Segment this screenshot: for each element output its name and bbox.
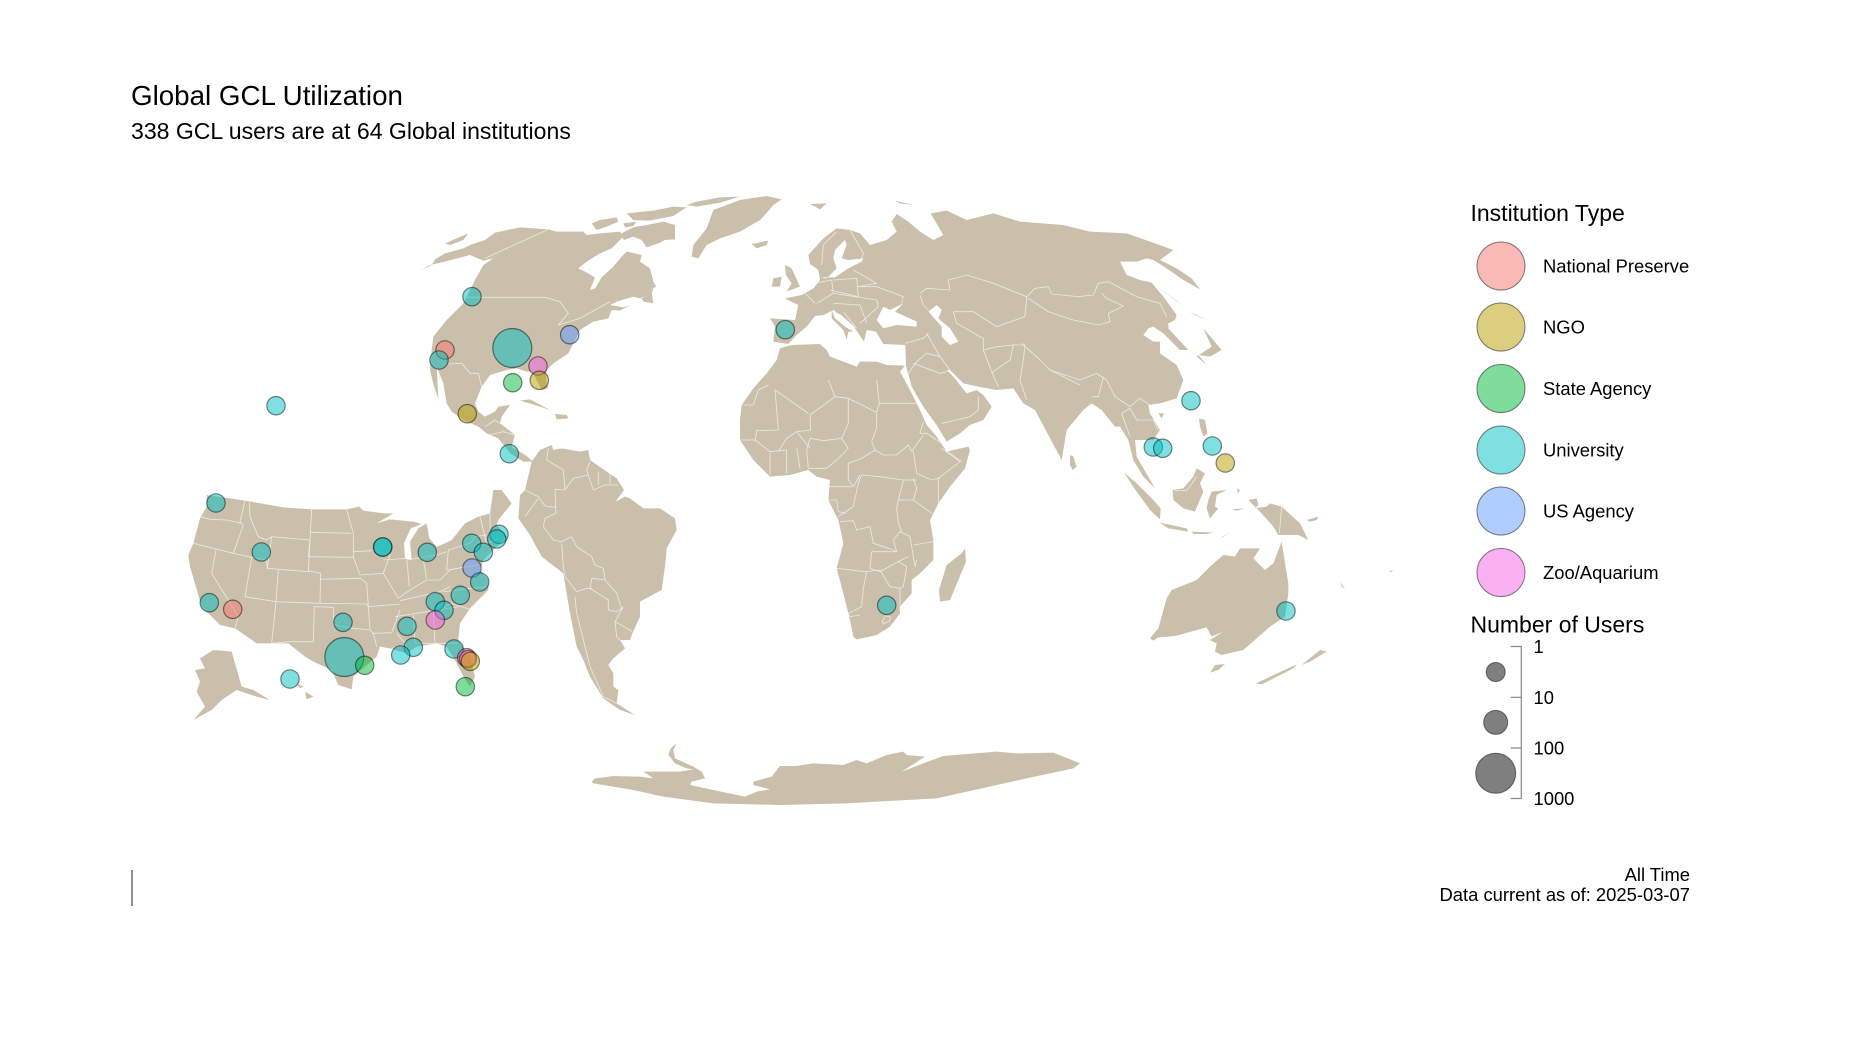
Moluccas — [1237, 488, 1240, 493]
borders: Oceania — [1175, 477, 1282, 533]
bubble: Vancouver university — [463, 288, 481, 306]
landmass: Oceania and Southeast Asia islands — [1124, 468, 1393, 684]
New Zealand — [1256, 664, 1297, 684]
Great Britain — [785, 265, 800, 292]
Italy — [832, 310, 853, 340]
bubble: Connecticut university — [488, 530, 506, 548]
legend item: Zoo/Aquarium — [1477, 548, 1659, 596]
Madagascar — [939, 548, 966, 602]
bubble: US inset university, Washington — [207, 494, 225, 512]
baseline tick mark — [131, 870, 133, 906]
bubble: Maryland US agency — [463, 559, 481, 577]
size scale labels: 100 — [1534, 738, 1564, 758]
New Guinea — [1248, 498, 1308, 540]
bubble: Thailand university — [1144, 438, 1163, 456]
bubble: Tennessee university — [426, 592, 444, 611]
bubble: Florida zoo — [458, 648, 476, 667]
legend item: NGO — [1477, 303, 1585, 351]
bubble: Mississippi university — [398, 617, 416, 636]
Hainan — [1158, 413, 1164, 418]
Adriatic — [835, 313, 855, 329]
legend heading: Institution Type — [1470, 200, 1625, 226]
bubble: south Florida state agency — [456, 678, 474, 696]
bubble: North Carolina university — [451, 586, 469, 604]
landmass: Antarctica — [592, 743, 1080, 805]
bubble: Mexico NGO — [458, 404, 476, 423]
world map — [188, 196, 1393, 805]
legend item: US Agency — [1477, 487, 1635, 535]
Java — [1160, 523, 1188, 532]
Newfoundland — [642, 292, 653, 303]
bubble: Washington DC US agency — [560, 326, 579, 344]
bubble: Virginia university — [470, 573, 489, 591]
bubble: New York university — [462, 534, 481, 552]
borders: North America — [448, 229, 610, 435]
bubble: Massachusetts university — [490, 525, 508, 544]
size scale labels: 1000 — [1534, 788, 1574, 809]
landmass: North America — [420, 196, 782, 462]
legend item: State Agency: State Agency — [1543, 378, 1652, 399]
Ireland — [772, 277, 782, 287]
bubble: north Texas university — [334, 613, 352, 632]
Alaska island — [445, 233, 468, 245]
landmass: contiguous United States inset — [188, 490, 512, 720]
legend: institution type — [1470, 200, 1689, 596]
bubble: Louisiana university — [392, 646, 410, 664]
bubble: Taiwan university — [1182, 392, 1200, 410]
bubble: Pennsylvania university — [474, 543, 492, 562]
bubble: Vietnam university — [1154, 439, 1172, 457]
subtitle: 338 GCL users are at 64 Global institutions — [131, 118, 571, 144]
landmass: South America — [518, 445, 677, 715]
Australia — [1150, 542, 1288, 655]
footer: time range and data date — [1440, 864, 1690, 905]
bubble: Mindanao NGO — [1216, 454, 1235, 472]
bubble: Wisconsin universities — [374, 538, 392, 556]
bubble: Australia university — [1277, 602, 1295, 620]
Alaska inset — [193, 650, 270, 720]
bubble: Florida NGO — [461, 652, 479, 670]
bubble: western US national preserve — [436, 341, 454, 359]
Tasmania — [1210, 664, 1225, 673]
Sulawesi — [1207, 490, 1227, 518]
borders: Africa — [740, 380, 962, 624]
bubble: Costa Rica university — [500, 444, 518, 463]
Sri Lanka — [1070, 455, 1077, 470]
size legend heading: Number of Users — [1470, 612, 1644, 638]
Black Sea — [877, 303, 917, 328]
size scale labels: 10 — [1534, 687, 1554, 708]
bubble: Texas state agency — [356, 656, 374, 674]
size scale labels — [1534, 636, 1574, 809]
New Caledonia — [1340, 582, 1345, 589]
legend: number of users — [1470, 612, 1644, 809]
bubble: Hawaii inset university — [281, 670, 299, 688]
bubble: Alabama coast university — [404, 638, 422, 656]
borders: South America — [525, 448, 632, 703]
legend item: National Preserve: National Preserve — [1543, 256, 1689, 276]
Caspian Sea — [928, 305, 958, 345]
Sumatra — [1124, 473, 1161, 519]
Honshu — [1197, 328, 1222, 365]
bubble: California university — [200, 594, 218, 612]
borders: US states — [193, 501, 500, 648]
footer: time range and data date: Data current as of: 2025-03-07 — [1440, 884, 1690, 905]
footer: time range and data date: All Time — [1625, 864, 1690, 885]
bubble: Spain university — [776, 320, 794, 339]
bubble: Nevada national preserve — [224, 600, 242, 618]
Sakhalin — [1152, 283, 1185, 307]
Cuba and Caribbean — [520, 399, 550, 410]
bubble: Idaho university — [252, 543, 270, 561]
size scale labels: 1 — [1534, 636, 1544, 657]
legend item: NGO: NGO — [1543, 316, 1585, 338]
landmass: Eurasia — [770, 201, 1222, 488]
institution bubbles — [200, 288, 1295, 696]
legend item: University: University — [1543, 440, 1625, 460]
bubble: Carolina university — [435, 601, 453, 620]
arctic islands — [592, 217, 618, 230]
Baltic Sea — [820, 240, 863, 278]
size scale bracket — [1511, 646, 1521, 798]
bubble: central US large university — [493, 328, 532, 368]
legend item: University — [1477, 426, 1625, 474]
New Britain — [1307, 517, 1318, 522]
bubble: Florida NGO world — [530, 371, 548, 389]
legend item: Zoo/Aquarium: Zoo/Aquarium — [1543, 562, 1659, 583]
bubble: South Africa university — [878, 596, 896, 614]
bubble: Gulf state agency — [504, 374, 522, 392]
bubble: Philippines university — [1203, 437, 1222, 455]
Greenland — [692, 196, 782, 258]
size circles — [1476, 662, 1516, 793]
Fiji — [1389, 570, 1393, 572]
bubble: north Florida university — [445, 640, 463, 658]
Borneo — [1173, 468, 1205, 512]
bubble: Texas large university — [325, 638, 364, 676]
title: Global GCL Utilization — [131, 80, 403, 111]
Iceland — [752, 241, 768, 248]
bubble: Florida national preserve — [459, 650, 477, 668]
legend item: National Preserve — [1477, 242, 1689, 290]
legend item: US Agency: US Agency — [1543, 500, 1635, 522]
bubble: southeast US zoo — [529, 357, 547, 375]
Hokkaido — [1190, 312, 1207, 320]
legend item: State Agency — [1477, 364, 1652, 412]
Franz Josef Land — [895, 201, 913, 205]
bubble: Michigan university — [418, 543, 436, 562]
bubble: southwest US university — [430, 351, 448, 369]
bubble: Georgia zoo — [426, 611, 444, 629]
Hawaii inset — [305, 692, 313, 699]
borders: Eurasia — [803, 230, 1167, 437]
Philippines — [1199, 418, 1207, 437]
landmass: Africa — [740, 344, 970, 639]
bubble: Hawaii university — [267, 396, 285, 415]
inland seas — [820, 240, 958, 345]
